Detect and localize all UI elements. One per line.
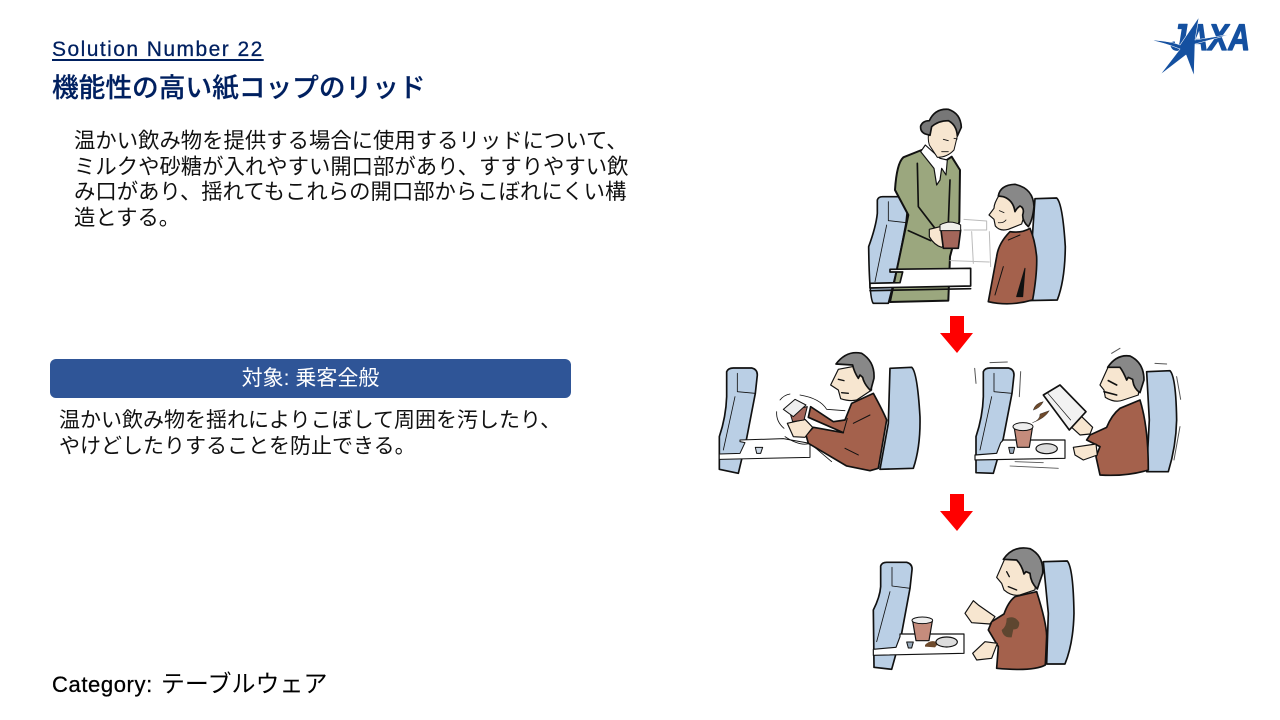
coffee cup [913, 621, 932, 641]
coffee cup [1014, 428, 1032, 447]
spilled coffee splashes [1033, 402, 1049, 423]
passenger body [988, 228, 1037, 304]
tray table [870, 268, 971, 288]
solution number: Solution Number 22 [52, 38, 264, 61]
right seat [1023, 198, 1065, 301]
description text: み口があり、揺れてもこれらの開口部からこぼれにくい構 [74, 180, 626, 204]
attendant dress [890, 150, 960, 302]
title: 機能性の高い紙コップのリッド [52, 66, 426, 105]
category: Category: テーブルウェア [52, 671, 327, 698]
description text: 温かい飲み物を提供する場合に使用するリッドについて、 [74, 129, 628, 153]
target audience bar [50, 359, 571, 398]
arrow: down 1 [940, 316, 973, 353]
description text: 造とする。 [74, 206, 180, 230]
passenger head [1100, 362, 1140, 401]
passenger head [989, 195, 1027, 230]
passenger body and arms [988, 592, 1047, 669]
benefit text: やけどしたりすることを防止できる。 [59, 435, 416, 458]
tray table [719, 439, 810, 459]
left seat [719, 368, 757, 473]
description text [74, 129, 628, 230]
meal cart background [950, 219, 991, 267]
tray table [975, 440, 1065, 460]
arrow: down 2 [940, 494, 973, 531]
passenger body and arm [1087, 400, 1148, 475]
illustration: passenger with stained shirt [873, 548, 1074, 669]
illustration: passenger holding unsteady cup [719, 353, 920, 473]
passenger body and arms [806, 393, 887, 471]
hands [787, 419, 813, 437]
saucer lid [1036, 444, 1057, 454]
illustration: attendant serving passenger [869, 109, 1065, 304]
right seat [1043, 561, 1074, 664]
left seat [873, 562, 912, 669]
target audience bar: 対象: 乗客全般 [242, 367, 379, 390]
lid on tray [936, 637, 957, 647]
left seat [869, 197, 908, 303]
benefit text: 温かい飲み物を揺れによりこぼして周囲を汚したり、 [59, 409, 561, 432]
coffee cup [941, 230, 961, 248]
hands [1073, 444, 1097, 460]
tray table [873, 634, 964, 655]
attendant collar [921, 145, 947, 185]
icon: JAXA logo: JAXA [1170, 17, 1250, 58]
hands [965, 601, 995, 624]
hands [929, 227, 947, 247]
benefit text [59, 409, 561, 458]
motion lines [777, 394, 845, 462]
seat motion lines [975, 348, 1181, 460]
left seat [976, 368, 1014, 473]
passenger head [997, 553, 1037, 595]
attendant head [928, 118, 960, 157]
right seat [1147, 371, 1177, 472]
description text: ミルクや砂糖が入れやすい開口部があり、すすりやすい飲 [74, 155, 628, 179]
right seat [880, 367, 920, 469]
icon: JAXA logo [1150, 17, 1250, 76]
illustration: passenger reading while coffee splashes [975, 348, 1181, 475]
coffee stain [1002, 617, 1019, 637]
tilted cup [789, 407, 807, 422]
passenger head [831, 363, 872, 401]
open book [1043, 385, 1086, 430]
